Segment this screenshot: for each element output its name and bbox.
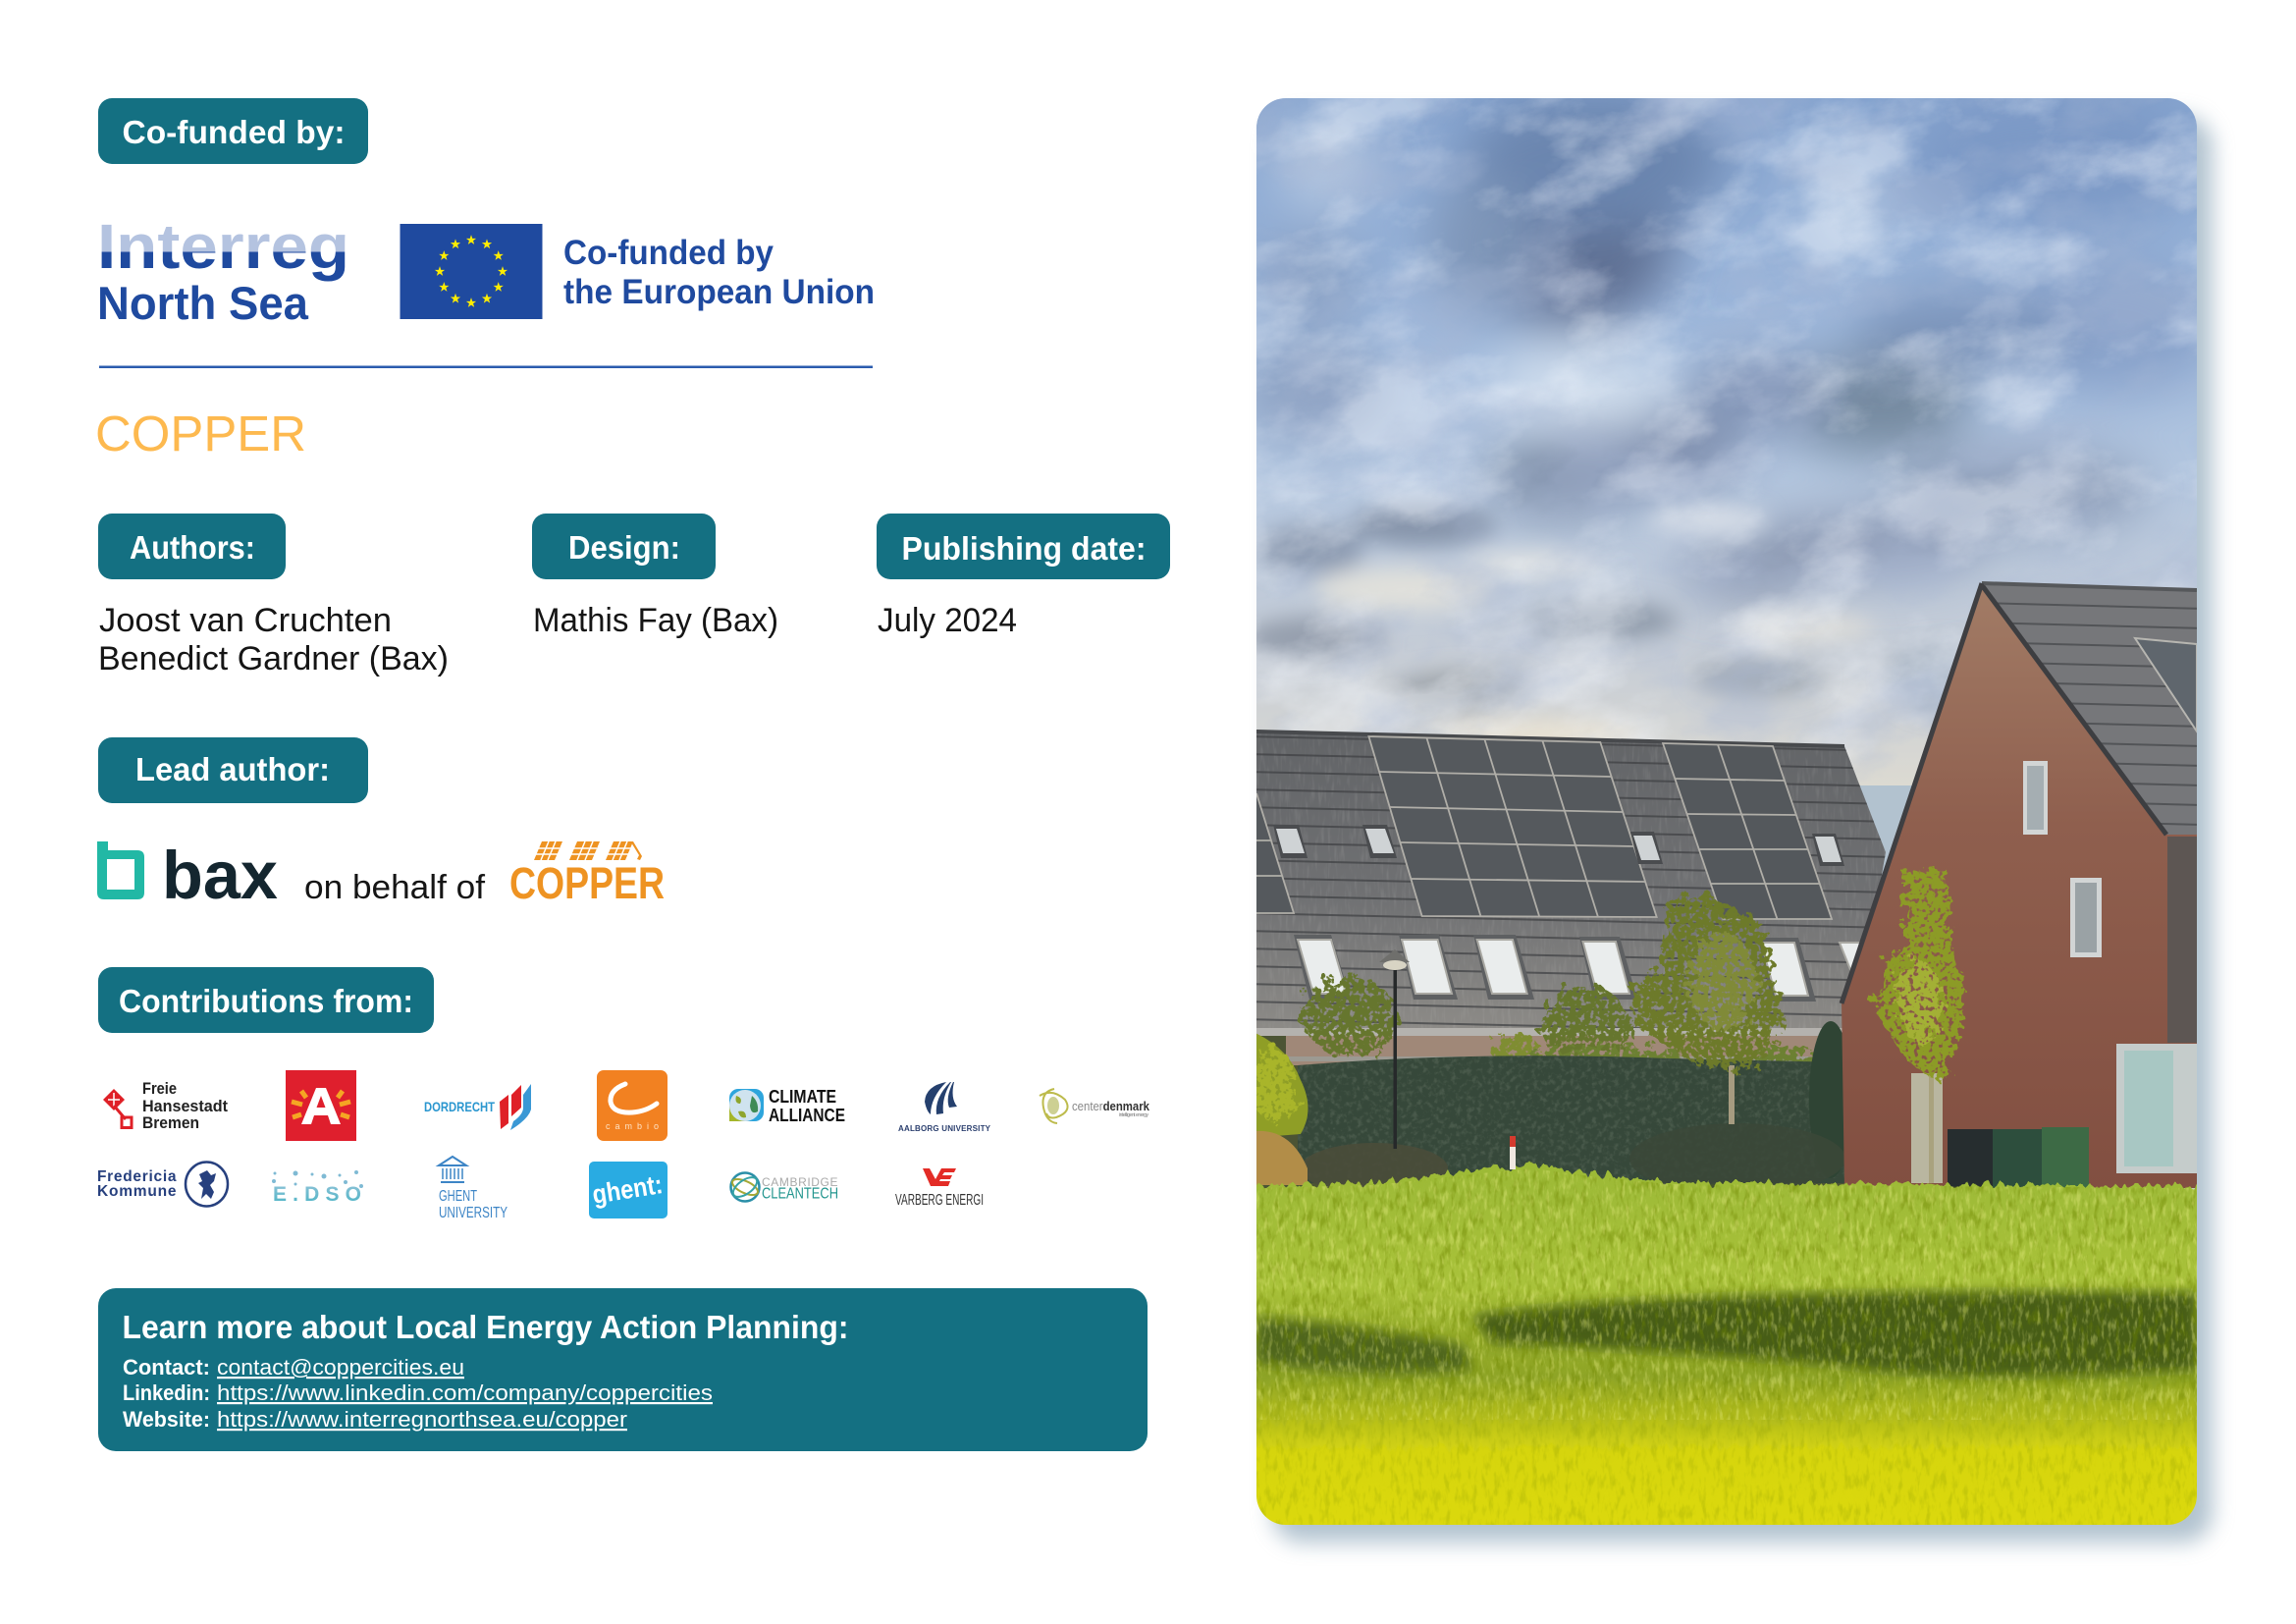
solar array: left: [1256, 793, 1294, 913]
shrubs in front of the roof: [1303, 977, 1816, 1070]
marker post: [1510, 1136, 1516, 1169]
logo: E.DSO: E.DSO: [273, 1183, 361, 1206]
photo: houses with solar panels under cloudy sky: [1256, 98, 2197, 1525]
logo: centerdenmark: centerdenmark: [1072, 1100, 1149, 1113]
sky: [1256, 98, 2197, 785]
text: Co-funded by the European Union: Co-funded by: [563, 234, 774, 272]
logo: Cambridge Cleantech: CAMBRIDGE: [762, 1175, 838, 1189]
main roof: [1247, 722, 1904, 1041]
tree: right: [1875, 869, 1965, 1183]
grey side wall: [2167, 837, 2197, 1043]
logo: Fredericia Kommune: [97, 1163, 228, 1206]
logo: Antwerp A: [286, 1070, 356, 1141]
house windows: [2023, 761, 2197, 1173]
badge: Lead author: Lead author:: [135, 751, 330, 787]
brick house: [1842, 583, 2197, 1190]
badge: Authors: Authors:: [130, 529, 255, 566]
logo: ghent: [589, 1162, 667, 1218]
contact line: contact@coppercities.eu: [217, 1355, 464, 1380]
logo: Climate Alliance: [729, 1086, 845, 1125]
solar array: right: [1663, 743, 1832, 919]
text: authors: Benedict Gardner (Bax): [98, 640, 449, 677]
logo: Cambridge Cleantech: CLEANTECH: [762, 1186, 838, 1202]
badge: Publishing date: [877, 514, 1170, 579]
logo: Freie Hansestadt Bremen: [103, 1080, 228, 1132]
logo: COPPER with solar roof: [509, 841, 665, 908]
logo: Freie Hansestadt Bremen: Bremen: [142, 1114, 199, 1132]
logo: Freie Hansestadt Bremen: Hansestadt: [142, 1098, 228, 1115]
logo: cambio: cambio: [606, 1121, 659, 1131]
logo: Climate Alliance: ALLIANCE: [769, 1105, 845, 1125]
hedge: [1296, 1021, 1865, 1194]
logo: Varberg Energi: [895, 1168, 984, 1209]
tree: centre: [1631, 893, 1785, 1124]
dark grass band: [1256, 1291, 2197, 1377]
badge: Design: Design:: [568, 529, 680, 566]
logo: centerdenmark: [1040, 1089, 1149, 1123]
text: Co-funded by the European Union: the European Union: [563, 273, 875, 311]
logo: ghent: ghent:: [590, 1169, 665, 1210]
logo: Aalborg University: AALBORG UNIVERSITY: [898, 1124, 991, 1133]
bins: [1948, 1127, 2089, 1190]
logo: Interreg North Sea: North Sea: [97, 277, 309, 329]
solar array: centre: [1368, 736, 1657, 917]
roof on the house: [1982, 583, 2197, 835]
text: designer: Mathis Fay (Bax): [533, 602, 778, 639]
logo: COPPER with solar roof: COPPER: [509, 858, 665, 908]
badge: Design: [532, 514, 716, 579]
logo: Varberg Energi: VARBERG ENERGI: [895, 1192, 984, 1209]
linkedin line: Linkedin:: [123, 1380, 210, 1405]
logo: cambio: [597, 1070, 667, 1141]
panel: learn more: [98, 1288, 1148, 1451]
text: publishing date: July 2024: [878, 602, 1017, 639]
badge: Contributions from: [98, 967, 434, 1033]
logo: Interreg North Sea: [97, 211, 349, 329]
logo: Cambridge Cleantech: [730, 1172, 838, 1202]
backing behind hedge and brick strip under eaves: [1256, 1036, 1855, 1193]
text: authors: [98, 602, 449, 677]
linkedin line: https://www.linkedin.com/company/coppercities: [217, 1380, 713, 1405]
website line: https://www.interregnorthsea.eu/copper: [217, 1407, 627, 1432]
logo: EU flag: [400, 224, 542, 319]
logo: Ghent University: UNIVERSITY: [439, 1205, 507, 1221]
logo: Ghent University: [439, 1157, 507, 1221]
solar panels: [1256, 736, 1832, 919]
roof windows: [1273, 825, 1861, 1001]
badge: Co-funded by: [98, 98, 368, 164]
grass field: [1247, 1164, 2209, 1532]
logo: Fredericia Kommune: Fredericia: [97, 1168, 177, 1185]
door: [1911, 1073, 1943, 1183]
text: authors: Joost van Cruchten: [99, 602, 392, 639]
contact line: Contact:: [123, 1355, 210, 1380]
logo: Interreg North Sea: Interreg: [97, 211, 349, 282]
logo: Climate Alliance: CLIMATE: [769, 1086, 836, 1107]
logo: Fredericia Kommune: Kommune: [97, 1183, 177, 1200]
badge: Publishing date: Publishing date:: [901, 530, 1147, 567]
bushes at left: [1256, 1033, 1308, 1185]
badge: Lead author: [98, 737, 368, 803]
logo: bax: [97, 838, 278, 913]
logo: Ghent University: GHENT: [439, 1188, 477, 1205]
badge: Authors: [98, 514, 286, 579]
contact line: [123, 1355, 464, 1380]
badge: Co-funded by: Co-funded by:: [122, 114, 346, 150]
lamp post: [1379, 949, 1410, 1149]
logo: centerdenmark: intelligent energy: [1119, 1112, 1148, 1118]
heading: learn more: Learn more about Local Energy Action Planning:: [122, 1309, 848, 1345]
logo: Aalborg University: [898, 1082, 991, 1133]
text: Co-funded by the European Union: [563, 234, 875, 311]
badge: Contributions from: Contributions from:: [119, 983, 413, 1019]
website line: Website:: [123, 1407, 210, 1432]
project name: COPPER: COPPER: [95, 406, 306, 461]
text: on behalf of: on behalf of: [304, 869, 486, 906]
photo shadow: [1272, 116, 2213, 1543]
logo: E.DSO: [272, 1170, 363, 1206]
logo: Dordrecht: [424, 1084, 531, 1130]
logo: Freie Hansestadt Bremen: Freie: [142, 1080, 177, 1098]
logo: bax: bax: [162, 838, 278, 913]
logo: Dordrecht: DORDRECHT: [424, 1099, 495, 1114]
